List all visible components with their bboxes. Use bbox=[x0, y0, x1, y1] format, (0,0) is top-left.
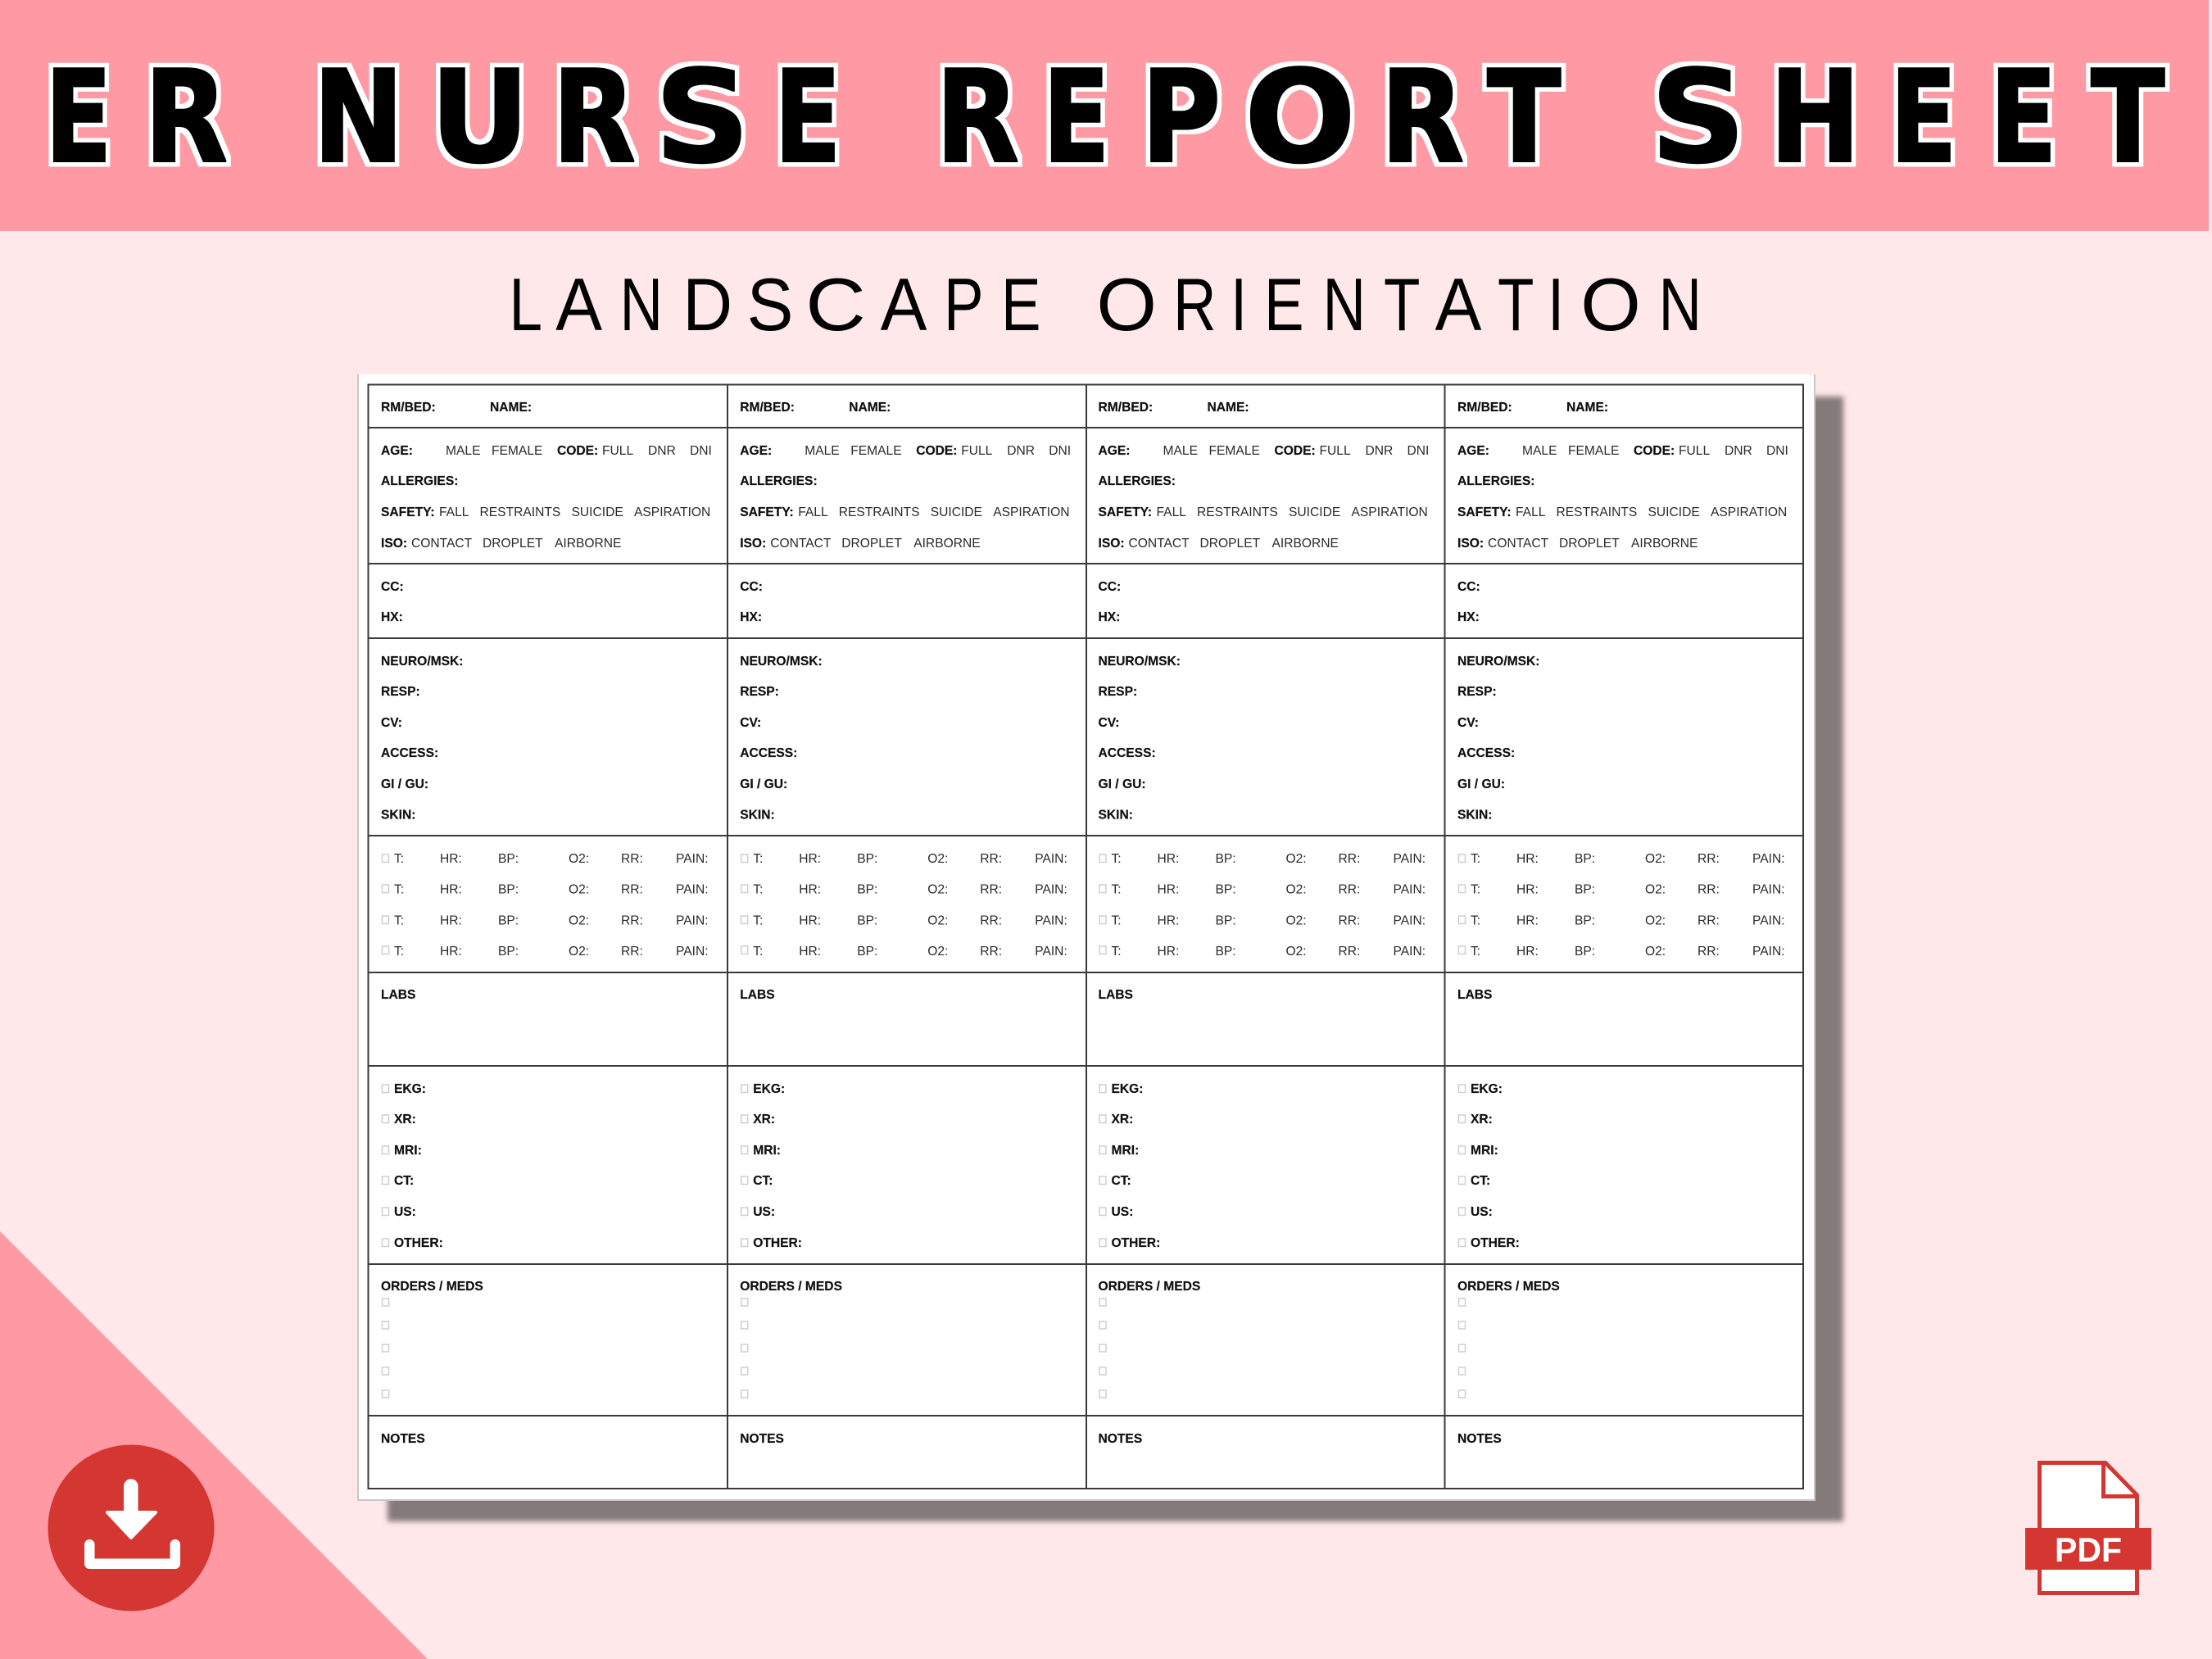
vital signs: RR: bbox=[1339, 883, 1360, 896]
vital signs: O2: bbox=[569, 914, 589, 927]
demographics: ISO: bbox=[740, 537, 766, 551]
vital signs: T: bbox=[1471, 914, 1480, 927]
room and name: NAME: bbox=[1208, 401, 1249, 415]
imaging: EKG: bbox=[1471, 1082, 1503, 1096]
vital signs: BP: bbox=[1575, 945, 1595, 959]
demographics: DROPLET bbox=[841, 537, 902, 551]
vital signs: O2: bbox=[1645, 883, 1666, 896]
demographics: CODE: bbox=[916, 444, 957, 458]
vital signs: BP: bbox=[1216, 852, 1236, 866]
vital signs: O2: bbox=[927, 914, 948, 927]
labs: LABS bbox=[381, 988, 415, 1002]
imaging: MRI: bbox=[753, 1144, 781, 1158]
vital signs: O2: bbox=[927, 883, 948, 896]
vital signs: HR: bbox=[440, 945, 462, 959]
demographics: AIRBORNE bbox=[913, 537, 981, 551]
imaging: XR: bbox=[1471, 1113, 1493, 1126]
vital signs: PAIN: bbox=[676, 945, 709, 959]
vital signs: O2: bbox=[1645, 852, 1666, 866]
demographics: RESTRAINTS bbox=[1557, 505, 1637, 519]
vital signs: T: bbox=[1111, 852, 1122, 866]
demographics: ASPIRATION bbox=[1352, 505, 1428, 519]
demographics bbox=[740, 444, 1071, 551]
orders and meds: ORDERS / MEDS bbox=[740, 1280, 842, 1294]
demographics: SUICIDE bbox=[1289, 505, 1340, 519]
demographics: ISO: bbox=[381, 537, 407, 551]
vital signs: PAIN: bbox=[676, 914, 709, 927]
demographics: AGE: bbox=[1457, 444, 1489, 458]
vital signs bbox=[741, 852, 1067, 959]
demographics: SUICIDE bbox=[931, 505, 982, 519]
demographics bbox=[381, 444, 712, 551]
imaging: XR: bbox=[753, 1113, 775, 1126]
vital signs: T: bbox=[753, 852, 763, 866]
vital signs: T: bbox=[1111, 945, 1122, 959]
imaging: US: bbox=[1471, 1205, 1493, 1219]
orders and meds bbox=[381, 1280, 483, 1398]
vital signs: HR: bbox=[1157, 945, 1179, 959]
vital signs: HR: bbox=[440, 852, 462, 866]
demographics: CONTACT bbox=[1488, 537, 1549, 551]
vital signs: PAIN: bbox=[1752, 914, 1785, 927]
demographics: CODE: bbox=[1634, 444, 1675, 458]
room and name: NAME: bbox=[849, 401, 891, 415]
demographics: FULL bbox=[1319, 444, 1351, 458]
vital signs: BP: bbox=[498, 914, 519, 927]
demographics: ASPIRATION bbox=[993, 505, 1069, 519]
vital signs: HR: bbox=[799, 883, 821, 896]
chief complaint and history bbox=[1098, 580, 1121, 624]
imaging: CT: bbox=[753, 1174, 773, 1188]
demographics: SUICIDE bbox=[572, 505, 623, 519]
demographics: CODE: bbox=[1275, 444, 1316, 458]
demographics: DNI bbox=[1407, 444, 1429, 458]
vital signs: T: bbox=[1111, 914, 1122, 927]
demographics: SAFETY: bbox=[1098, 505, 1152, 519]
vital signs: HR: bbox=[799, 852, 821, 866]
chief complaint and history: CC: bbox=[1457, 580, 1480, 594]
demographics: FEMALE bbox=[1209, 444, 1260, 458]
demographics: AIRBORNE bbox=[1631, 537, 1698, 551]
icon: PDF file: PDF bbox=[2055, 1530, 2122, 1569]
vital signs: RR: bbox=[621, 945, 643, 959]
demographics: MALE bbox=[805, 444, 840, 458]
orders and meds bbox=[740, 1280, 842, 1398]
vital signs: RR: bbox=[980, 914, 1002, 927]
vital signs: BP: bbox=[498, 852, 519, 866]
vital signs: RR: bbox=[621, 883, 643, 896]
demographics: ALLERGIES: bbox=[1098, 474, 1176, 488]
chief complaint and history: HX: bbox=[740, 610, 762, 624]
imaging: EKG: bbox=[394, 1082, 426, 1096]
vital signs: PAIN: bbox=[1393, 914, 1426, 927]
demographics: ASPIRATION bbox=[634, 505, 710, 519]
demographics: FALL bbox=[1516, 505, 1546, 519]
vital signs: RR: bbox=[621, 852, 643, 866]
body systems: ACCESS: bbox=[1457, 746, 1515, 760]
column 3 bbox=[1098, 401, 1429, 1446]
demographics: FEMALE bbox=[492, 444, 542, 458]
demographics: MALE bbox=[446, 444, 480, 458]
orders and meds bbox=[1098, 1280, 1200, 1398]
body systems: RESP: bbox=[1457, 685, 1497, 699]
demographics: RESTRAINTS bbox=[1197, 505, 1278, 519]
demographics: SAFETY: bbox=[1457, 505, 1512, 519]
vital signs: HR: bbox=[1157, 852, 1179, 866]
icon: download bbox=[48, 1445, 215, 1611]
notes: NOTES bbox=[740, 1432, 784, 1446]
demographics: FALL bbox=[1157, 505, 1186, 519]
chief complaint and history: CC: bbox=[381, 580, 404, 594]
column 2 bbox=[740, 401, 1071, 1446]
body systems: CV: bbox=[381, 716, 402, 730]
notes: NOTES bbox=[1098, 1432, 1142, 1446]
vital signs: BP: bbox=[1575, 852, 1595, 866]
body systems: NEURO/MSK: bbox=[740, 655, 823, 669]
body systems: RESP: bbox=[1098, 685, 1137, 699]
vital signs: BP: bbox=[857, 883, 877, 896]
vital signs: RR: bbox=[980, 852, 1002, 866]
demographics bbox=[1098, 444, 1429, 551]
imaging: XR: bbox=[1111, 1113, 1133, 1126]
imaging bbox=[1458, 1082, 1520, 1250]
body systems: ACCESS: bbox=[1098, 746, 1156, 760]
corner triangle bbox=[0, 1231, 428, 1659]
orders and meds: ORDERS / MEDS bbox=[1457, 1280, 1560, 1294]
vital signs: HR: bbox=[1516, 883, 1539, 896]
sheet drop shadow bbox=[388, 397, 1843, 1521]
demographics: AIRBORNE bbox=[1271, 537, 1339, 551]
body systems: NEURO/MSK: bbox=[1098, 655, 1181, 669]
imaging bbox=[741, 1082, 802, 1250]
vital signs: PAIN: bbox=[1752, 883, 1785, 896]
demographics: SUICIDE bbox=[1648, 505, 1700, 519]
demographics: SAFETY: bbox=[381, 505, 435, 519]
vital signs bbox=[1458, 852, 1785, 959]
chief complaint and history bbox=[381, 580, 404, 624]
vital signs: HR: bbox=[1157, 883, 1179, 896]
vital signs: T: bbox=[394, 914, 404, 927]
vital signs: HR: bbox=[1516, 852, 1539, 866]
body systems: ACCESS: bbox=[381, 746, 438, 760]
demographics: DNI bbox=[1766, 444, 1788, 458]
vital signs: BP: bbox=[1575, 883, 1595, 896]
vital signs: T: bbox=[1471, 945, 1480, 959]
body systems: SKIN: bbox=[740, 808, 775, 823]
vital signs: BP: bbox=[1216, 883, 1236, 896]
vital signs: RR: bbox=[1339, 852, 1360, 866]
body systems bbox=[740, 655, 823, 823]
imaging: CT: bbox=[1471, 1174, 1490, 1188]
orders and meds: ORDERS / MEDS bbox=[381, 1280, 483, 1294]
vital signs: PAIN: bbox=[1752, 945, 1785, 959]
vital signs: BP: bbox=[857, 914, 877, 927]
vital signs: PAIN: bbox=[1393, 852, 1426, 866]
imaging: MRI: bbox=[1111, 1144, 1139, 1158]
body systems: NEURO/MSK: bbox=[1457, 655, 1540, 669]
demographics: FEMALE bbox=[1568, 444, 1619, 458]
demographics: DNR bbox=[1007, 444, 1035, 458]
vital signs: BP: bbox=[857, 852, 877, 866]
body systems: RESP: bbox=[740, 685, 779, 699]
vital signs: BP: bbox=[857, 945, 877, 959]
vital signs: HR: bbox=[1516, 914, 1539, 927]
imaging bbox=[382, 1082, 443, 1250]
vital signs: T: bbox=[394, 883, 404, 896]
table grid bbox=[368, 384, 1803, 1489]
vital signs: RR: bbox=[1698, 945, 1720, 959]
body systems: GI / GU: bbox=[381, 777, 428, 791]
demographics: FALL bbox=[798, 505, 828, 519]
demographics: CODE: bbox=[557, 444, 598, 458]
title: ER NU RS E REPO RT S HEET bbox=[45, 44, 2164, 193]
imaging: US: bbox=[753, 1205, 775, 1219]
subtitle: LA N D S C A PE O RIENTA TIO N bbox=[510, 263, 1702, 347]
notes: NOTES bbox=[381, 1432, 425, 1446]
body systems bbox=[1098, 655, 1181, 823]
labs: LABS bbox=[740, 988, 775, 1002]
room and name: RM/BED: bbox=[1457, 401, 1512, 415]
orders and meds bbox=[1457, 1280, 1560, 1398]
demographics: RESTRAINTS bbox=[839, 505, 919, 519]
vital signs: T: bbox=[394, 852, 404, 866]
imaging: EKG: bbox=[1111, 1082, 1143, 1096]
notes: NOTES bbox=[1457, 1432, 1502, 1446]
imaging: MRI: bbox=[394, 1144, 422, 1158]
vital signs: T: bbox=[753, 883, 763, 896]
demographics: AGE: bbox=[740, 444, 772, 458]
vital signs bbox=[382, 852, 709, 959]
demographics: CONTACT bbox=[411, 537, 473, 551]
demographics: RESTRAINTS bbox=[480, 505, 560, 519]
vital signs: RR: bbox=[980, 883, 1002, 896]
vital signs: T: bbox=[753, 945, 763, 959]
body systems: SKIN: bbox=[381, 808, 415, 823]
demographics: ALLERGIES: bbox=[381, 474, 458, 488]
vital signs: BP: bbox=[1575, 914, 1595, 927]
body systems: CV: bbox=[1457, 716, 1479, 730]
body systems: GI / GU: bbox=[1457, 777, 1505, 791]
demographics: ISO: bbox=[1457, 537, 1484, 551]
chief complaint and history: HX: bbox=[1457, 610, 1480, 624]
imaging: CT: bbox=[1111, 1174, 1131, 1188]
body systems: GI / GU: bbox=[740, 777, 787, 791]
body systems bbox=[381, 655, 464, 823]
imaging: CT: bbox=[394, 1174, 414, 1188]
chief complaint and history bbox=[1457, 580, 1480, 624]
demographics: CONTACT bbox=[1129, 537, 1190, 551]
vital signs: BP: bbox=[1216, 945, 1236, 959]
vital signs: BP: bbox=[498, 883, 519, 896]
vital signs: O2: bbox=[1286, 914, 1307, 927]
demographics: FULL bbox=[961, 444, 993, 458]
vital signs: O2: bbox=[569, 945, 589, 959]
body systems: CV: bbox=[1098, 716, 1119, 730]
room and name: NAME: bbox=[1566, 401, 1608, 415]
chief complaint and history: CC: bbox=[740, 580, 763, 594]
vital signs: HR: bbox=[799, 914, 821, 927]
body systems bbox=[1457, 655, 1540, 823]
demographics: FALL bbox=[439, 505, 469, 519]
demographics: DNR bbox=[1725, 444, 1752, 458]
vital signs: HR: bbox=[1516, 945, 1539, 959]
demographics: ISO: bbox=[1098, 537, 1125, 551]
vital signs: T: bbox=[394, 945, 404, 959]
demographics: DROPLET bbox=[1199, 537, 1261, 551]
icon: PDF file bbox=[2025, 1463, 2151, 1593]
vital signs: BP: bbox=[1216, 914, 1236, 927]
imaging: OTHER: bbox=[394, 1236, 443, 1250]
header band bbox=[0, 0, 2209, 231]
room and name: RM/BED: bbox=[381, 401, 436, 415]
column 1 bbox=[381, 401, 712, 1446]
vital signs: O2: bbox=[1286, 852, 1307, 866]
room and name: RM/BED: bbox=[1098, 401, 1153, 415]
imaging: OTHER: bbox=[753, 1236, 802, 1250]
vital signs: O2: bbox=[927, 852, 948, 866]
vital signs: T: bbox=[1111, 883, 1122, 896]
demographics: MALE bbox=[1522, 444, 1557, 458]
demographics: ALLERGIES: bbox=[1457, 474, 1534, 488]
vital signs: HR: bbox=[1157, 914, 1179, 927]
vital signs: PAIN: bbox=[1035, 852, 1067, 866]
vital signs: RR: bbox=[1698, 883, 1720, 896]
vital signs: PAIN: bbox=[1035, 945, 1067, 959]
demographics: AIRBORNE bbox=[555, 537, 621, 551]
body systems: SKIN: bbox=[1457, 808, 1492, 823]
vital signs: O2: bbox=[569, 852, 589, 866]
vital signs: T: bbox=[1471, 883, 1480, 896]
vital signs: BP: bbox=[498, 945, 519, 959]
vital signs: PAIN: bbox=[1035, 883, 1067, 896]
vital signs: PAIN: bbox=[1752, 852, 1785, 866]
demographics: SAFETY: bbox=[740, 505, 794, 519]
vital signs: T: bbox=[1471, 852, 1480, 866]
demographics: AGE: bbox=[1098, 444, 1130, 458]
imaging: OTHER: bbox=[1111, 1236, 1160, 1250]
chief complaint and history: HX: bbox=[1098, 610, 1120, 624]
vital signs: PAIN: bbox=[1393, 945, 1426, 959]
vital signs: PAIN: bbox=[1035, 914, 1067, 927]
vital signs: O2: bbox=[1645, 914, 1666, 927]
demographics: DNI bbox=[690, 444, 712, 458]
imaging: OTHER: bbox=[1471, 1236, 1520, 1250]
room and name: NAME: bbox=[490, 401, 532, 415]
demographics: DROPLET bbox=[483, 537, 543, 551]
imaging: US: bbox=[1111, 1205, 1133, 1219]
chief complaint and history: HX: bbox=[381, 610, 403, 624]
vital signs: HR: bbox=[799, 945, 821, 959]
labs: LABS bbox=[1098, 988, 1133, 1002]
report sheet paper bbox=[358, 374, 1815, 1500]
body systems: GI / GU: bbox=[1098, 777, 1146, 791]
demographics: AGE: bbox=[381, 444, 413, 458]
vital signs: O2: bbox=[927, 945, 948, 959]
vital signs: O2: bbox=[569, 883, 589, 896]
vital signs: RR: bbox=[1339, 945, 1360, 959]
demographics: CONTACT bbox=[770, 537, 832, 551]
demographics: DROPLET bbox=[1559, 537, 1620, 551]
demographics: DNR bbox=[1365, 444, 1393, 458]
vital signs: O2: bbox=[1286, 945, 1307, 959]
vital signs: RR: bbox=[1339, 914, 1360, 927]
body systems: ACCESS: bbox=[740, 746, 797, 760]
demographics: FEMALE bbox=[850, 444, 902, 458]
imaging: MRI: bbox=[1471, 1144, 1498, 1158]
body systems: CV: bbox=[740, 716, 761, 730]
body systems: RESP: bbox=[381, 685, 420, 699]
demographics: FULL bbox=[1679, 444, 1710, 458]
imaging: US: bbox=[394, 1205, 416, 1219]
body systems: NEURO/MSK: bbox=[381, 655, 464, 669]
vital signs: RR: bbox=[621, 914, 643, 927]
room and name: RM/BED: bbox=[740, 401, 795, 415]
vital signs: RR: bbox=[980, 945, 1002, 959]
vital signs: O2: bbox=[1645, 945, 1666, 959]
vital signs: HR: bbox=[440, 883, 462, 896]
imaging: XR: bbox=[394, 1113, 416, 1126]
labs: LABS bbox=[1457, 988, 1492, 1002]
vital signs bbox=[1099, 852, 1426, 959]
vital signs: PAIN: bbox=[676, 852, 709, 866]
vital signs: RR: bbox=[1698, 852, 1720, 866]
demographics: ALLERGIES: bbox=[740, 474, 818, 488]
body systems: SKIN: bbox=[1098, 808, 1133, 823]
orders and meds: ORDERS / MEDS bbox=[1098, 1280, 1200, 1294]
chief complaint and history bbox=[740, 580, 763, 624]
vital signs: O2: bbox=[1286, 883, 1307, 896]
vital signs: PAIN: bbox=[1393, 883, 1426, 896]
demographics: FULL bbox=[602, 444, 633, 458]
demographics: DNI bbox=[1049, 444, 1071, 458]
vital signs: RR: bbox=[1698, 914, 1720, 927]
imaging: EKG: bbox=[753, 1082, 785, 1096]
vital signs: HR: bbox=[440, 914, 462, 927]
vital signs: PAIN: bbox=[676, 883, 709, 896]
demographics bbox=[1457, 444, 1788, 551]
demographics: ASPIRATION bbox=[1711, 505, 1787, 519]
demographics: MALE bbox=[1163, 444, 1198, 458]
demographics: DNR bbox=[648, 444, 676, 458]
imaging bbox=[1099, 1082, 1160, 1250]
chief complaint and history: CC: bbox=[1098, 580, 1121, 594]
vital signs: T: bbox=[753, 914, 763, 927]
column 4 bbox=[1457, 401, 1788, 1446]
